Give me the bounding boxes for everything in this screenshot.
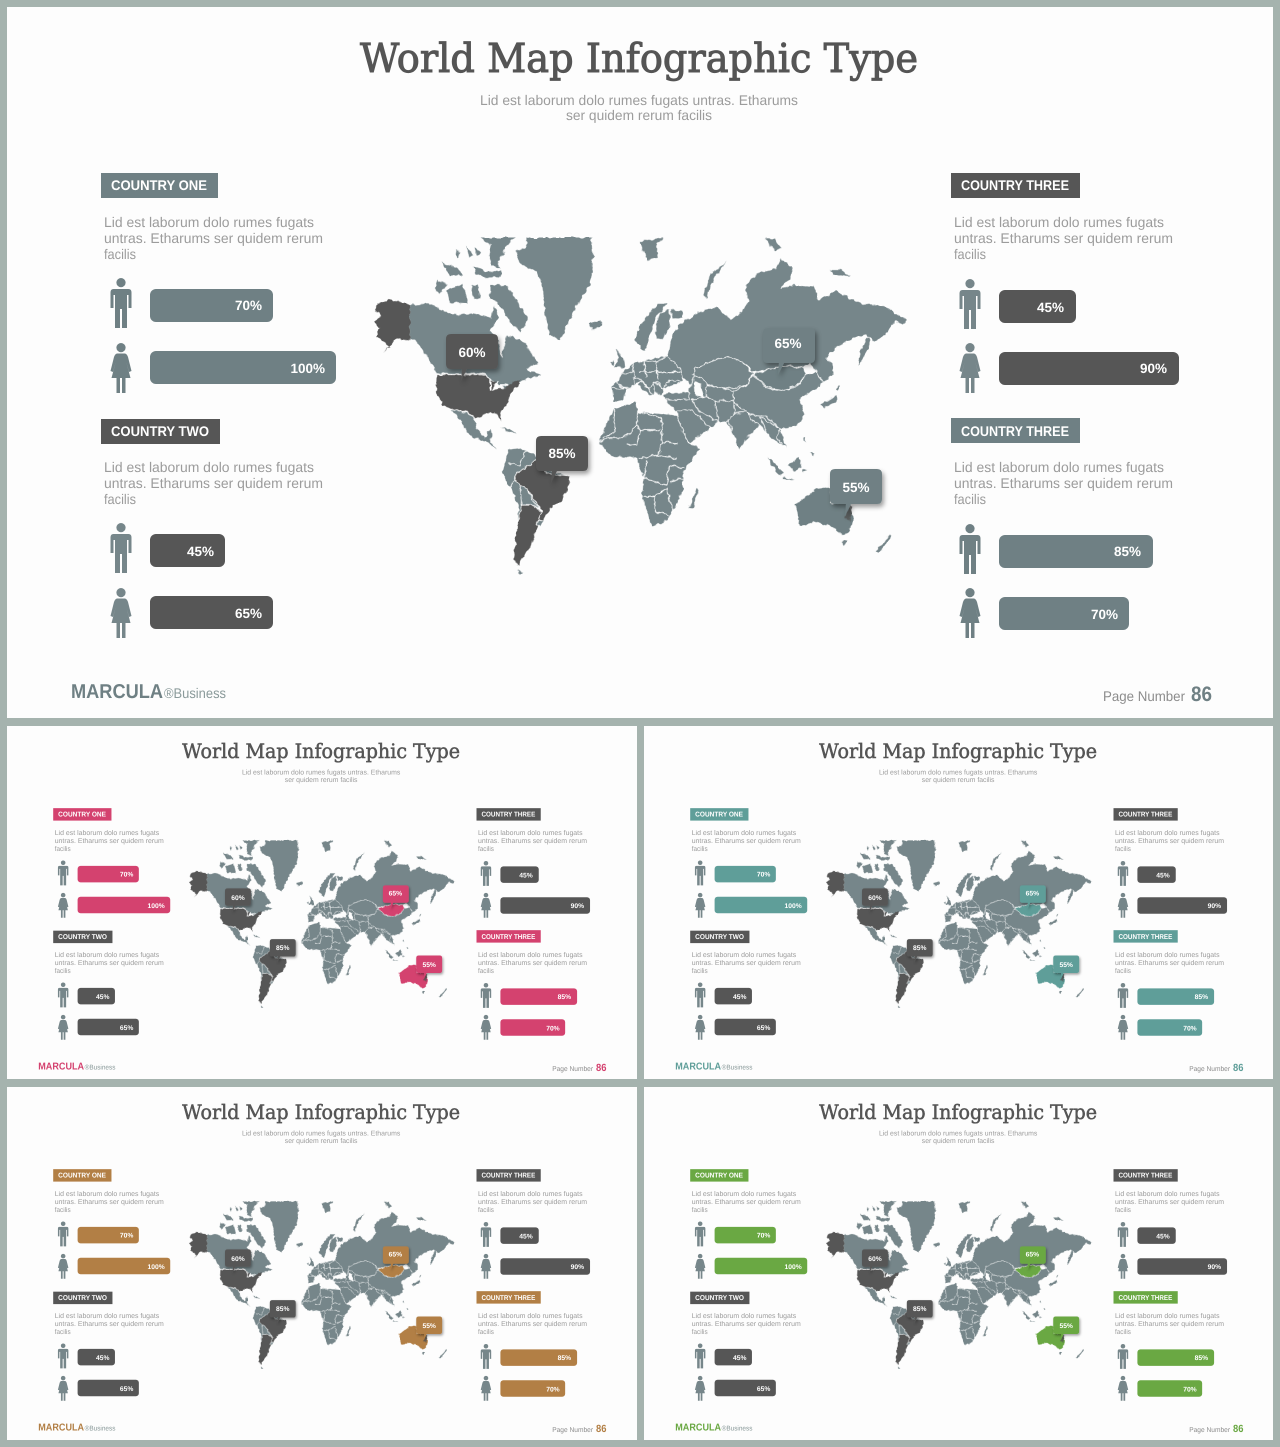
panel: country one: Lid est laborum dolo rumes fugats: [104, 214, 314, 230]
panel: country one: facilis: [104, 246, 136, 262]
green slide content: untras. Etharums ser quidem rerum: [692, 1198, 801, 1206]
teal slide content: untras. Etharums ser quidem rerum: [1115, 837, 1224, 845]
pink slide content: facilis: [55, 845, 71, 852]
pink slide content: 90%: [571, 902, 584, 909]
panel: country three top: 45%: [1037, 300, 1064, 315]
green slide content: Lid est laborum dolo rumes fugats untras. Etharums: [879, 1129, 1037, 1137]
teal slide content: COUNTRY THREE: [1118, 933, 1172, 941]
panel: country two: 45%: [187, 544, 214, 559]
teal slide content: Page Number: [1189, 1065, 1230, 1073]
green slide content: 100%: [785, 1263, 802, 1270]
brown slide content: COUNTRY TWO: [58, 1294, 107, 1302]
panel: country three top: untras. Etharums ser quidem rerum: [954, 230, 1173, 246]
teal slide content: 85%: [913, 944, 927, 952]
page number: Page Number: [1103, 688, 1185, 704]
panel: country three bottom: COUNTRY THREE: [961, 423, 1069, 439]
subtitle: Lid est laborum dolo rumes fugats untras. Etharums: [480, 92, 798, 108]
pink slide content: 45%: [96, 993, 109, 1000]
teal slide content: 45%: [1156, 871, 1170, 879]
teal slide content: 86: [1233, 1062, 1243, 1074]
footer brand: ®Business: [164, 685, 226, 701]
pink slide content: World Map Infographic Type: [182, 740, 460, 763]
panel: country three bottom: untras. Etharums ser quidem rerum: [954, 475, 1173, 491]
callout 65%: [763, 328, 815, 375]
panel: country two: [101, 419, 323, 638]
green slide content: facilis: [692, 1206, 708, 1213]
teal slide content: untras. Etharums ser quidem rerum: [1115, 959, 1224, 967]
teal slide content: facilis: [692, 967, 708, 974]
brown slide content: COUNTRY ONE: [58, 1171, 106, 1179]
brown slide content: Lid est laborum dolo rumes fugats: [478, 1190, 583, 1198]
teal slide content: 65%: [1026, 889, 1039, 897]
teal slide content: facilis: [1115, 967, 1131, 974]
brown slide content: COUNTRY THREE: [481, 1171, 535, 1179]
teal slide content: COUNTRY TWO: [695, 933, 744, 941]
brown slide content: untras. Etharums ser quidem rerum: [478, 1320, 587, 1328]
brown slide content: COUNTRY THREE: [481, 1294, 535, 1302]
pink slide content: [38, 740, 606, 1074]
green slide content: 70%: [757, 1231, 770, 1239]
teal slide content: 70%: [1183, 1024, 1197, 1032]
green slide content: facilis: [1115, 1328, 1131, 1335]
brown slide content: Lid est laborum dolo rumes fugats: [478, 1312, 583, 1320]
pink slide content: Page Number: [552, 1065, 593, 1073]
panel: green slide: [644, 1087, 1273, 1440]
pink slide content: Lid est laborum dolo rumes fugats untras. Etharums: [242, 768, 400, 776]
green slide content: 86: [1233, 1423, 1243, 1435]
brown slide content: facilis: [55, 1206, 71, 1213]
panel: country two: 65%: [235, 606, 262, 621]
pink slide content: Lid est laborum dolo rumes fugats: [55, 829, 159, 837]
pink slide content: facilis: [55, 967, 71, 974]
panel: country three top: [951, 173, 1179, 393]
green slide content: COUNTRY THREE: [1118, 1294, 1172, 1302]
pink slide content: 86: [596, 1062, 606, 1074]
callout 55%: 55%: [842, 480, 870, 495]
pink slide content: ser quidem rerum facilis: [285, 775, 357, 783]
brown slide content: untras. Etharums ser quidem rerum: [55, 1320, 164, 1328]
brown slide content: Lid est laborum dolo rumes fugats: [55, 1190, 159, 1198]
green slide content: 65%: [1026, 1250, 1039, 1258]
brown slide content: facilis: [55, 1328, 71, 1335]
footer brand: MARCULA: [71, 681, 163, 703]
panel: country three bottom: 70%: [1091, 607, 1118, 622]
panel: teal slide: [644, 726, 1273, 1079]
pink slide content: untras. Etharums ser quidem rerum: [55, 837, 164, 845]
green slide content: 85%: [913, 1305, 927, 1313]
title: World Map Infographic Type: [360, 36, 918, 82]
teal slide content: Lid est laborum dolo rumes fugats: [1115, 829, 1220, 837]
brown slide content: 90%: [571, 1263, 584, 1270]
teal slide content: 90%: [1208, 902, 1221, 909]
pink slide content: facilis: [478, 845, 494, 852]
green slide content: ®Business: [722, 1424, 752, 1432]
brown slide content: 65%: [120, 1385, 133, 1392]
panel: country three bottom: facilis: [954, 491, 986, 507]
panel: country one: COUNTRY ONE: [111, 177, 207, 193]
panel: country one: [101, 173, 336, 393]
brown slide content: 85%: [276, 1305, 290, 1313]
brown slide content: Lid est laborum dolo rumes fugats: [55, 1312, 159, 1320]
pink slide content: COUNTRY ONE: [58, 810, 106, 818]
green slide content: untras. Etharums ser quidem rerum: [1115, 1320, 1224, 1328]
panel: country one: untras. Etharums ser quidem rerum: [104, 230, 323, 246]
brown slide content: 45%: [519, 1232, 533, 1240]
callout 65%: 65%: [774, 336, 802, 351]
brown slide content: Lid est laborum dolo rumes fugats untras. Etharums: [242, 1129, 400, 1137]
teal slide content: [675, 740, 1243, 1074]
callout 85%: [536, 436, 588, 483]
green slide content: ser quidem rerum facilis: [922, 1136, 994, 1144]
world map: [373, 238, 908, 574]
callout 60%: 60%: [458, 345, 486, 360]
pink slide content: Lid est laborum dolo rumes fugats: [478, 951, 583, 959]
footer brand: [71, 681, 226, 703]
brown slide content: 70%: [546, 1385, 560, 1393]
pink slide content: 85%: [276, 944, 290, 952]
teal slide content: 100%: [785, 902, 802, 909]
green slide content: 45%: [733, 1354, 746, 1361]
teal slide content: 60%: [868, 894, 882, 901]
pink slide content: COUNTRY THREE: [481, 933, 535, 941]
pink slide content: 45%: [519, 871, 533, 879]
brown slide content: ®Business: [85, 1424, 115, 1432]
green slide content: Lid est laborum dolo rumes fugats: [692, 1190, 796, 1198]
teal slide content: COUNTRY THREE: [1118, 810, 1172, 818]
brown slide content: 70%: [120, 1231, 133, 1239]
brown slide content: 60%: [231, 1255, 245, 1262]
panel: country three bottom: Lid est laborum dolo rumes fugats: [954, 459, 1164, 475]
green slide content: World Map Infographic Type: [819, 1101, 1097, 1124]
teal slide content: Lid est laborum dolo rumes fugats: [692, 829, 796, 837]
pink slide content: COUNTRY TWO: [58, 933, 107, 941]
pink slide content: 85%: [558, 993, 571, 1000]
pink slide content: 55%: [422, 961, 436, 969]
green slide content: 85%: [1195, 1354, 1208, 1361]
panel: country three top: COUNTRY THREE: [961, 177, 1069, 193]
brown slide content: 45%: [96, 1354, 109, 1361]
teal slide content: 55%: [1059, 961, 1073, 969]
panel: pink slide: [7, 726, 637, 1079]
teal slide content: untras. Etharums ser quidem rerum: [692, 837, 801, 845]
green slide content: 45%: [1156, 1232, 1170, 1240]
green slide content: COUNTRY ONE: [695, 1171, 743, 1179]
panel: country three top: 90%: [1140, 361, 1167, 376]
panel: country two: COUNTRY TWO: [111, 423, 209, 439]
page number: 86: [1191, 683, 1212, 706]
pink slide content: 65%: [389, 889, 402, 897]
teal slide content: World Map Infographic Type: [819, 740, 1097, 763]
green slide content: 55%: [1059, 1322, 1073, 1330]
panel: country three top: Lid est laborum dolo rumes fugats: [954, 214, 1164, 230]
teal slide content: Lid est laborum dolo rumes fugats untras. Etharums: [879, 768, 1037, 776]
teal slide content: MARCULA: [675, 1061, 721, 1072]
brown slide content: untras. Etharums ser quidem rerum: [55, 1198, 164, 1206]
panel: brown slide: [7, 1087, 637, 1440]
green slide content: untras. Etharums ser quidem rerum: [1115, 1198, 1224, 1206]
teal slide content: ®Business: [722, 1063, 752, 1071]
panel: country one: 70%: [235, 298, 262, 313]
green slide content: facilis: [692, 1328, 708, 1335]
brown slide content: World Map Infographic Type: [182, 1101, 460, 1124]
brown slide content: untras. Etharums ser quidem rerum: [478, 1198, 587, 1206]
pink slide content: 70%: [546, 1024, 560, 1032]
pink slide content: untras. Etharums ser quidem rerum: [55, 959, 164, 967]
green slide content: Lid est laborum dolo rumes fugats: [1115, 1312, 1220, 1320]
teal slide content: Lid est laborum dolo rumes fugats: [692, 951, 796, 959]
pink slide content: 100%: [148, 902, 165, 909]
teal slide content: 85%: [1195, 993, 1208, 1000]
green slide content: untras. Etharums ser quidem rerum: [692, 1320, 801, 1328]
green slide content: facilis: [1115, 1206, 1131, 1213]
teal slide content: 65%: [757, 1024, 770, 1031]
panel: country two: untras. Etharums ser quidem rerum: [104, 475, 323, 491]
pink slide content: 70%: [120, 870, 133, 878]
brown slide content: facilis: [478, 1328, 494, 1335]
teal slide content: COUNTRY ONE: [695, 810, 743, 818]
brown slide content: 100%: [148, 1263, 165, 1270]
brown slide content: 85%: [558, 1354, 571, 1361]
panel: country three top: facilis: [954, 246, 986, 262]
page number: [1103, 683, 1212, 706]
panel: main slide: [7, 7, 1273, 718]
pink slide content: facilis: [478, 967, 494, 974]
teal slide content: untras. Etharums ser quidem rerum: [692, 959, 801, 967]
pink slide content: 60%: [231, 894, 245, 901]
green slide content: MARCULA: [675, 1422, 721, 1433]
pink slide content: 65%: [120, 1024, 133, 1031]
green slide content: Page Number: [1189, 1426, 1230, 1434]
brown slide content: [38, 1101, 606, 1435]
subtitle: [480, 92, 798, 123]
callout 55%: [830, 469, 882, 516]
green slide content: COUNTRY THREE: [1118, 1171, 1172, 1179]
pink slide content: Lid est laborum dolo rumes fugats: [55, 951, 159, 959]
pink slide content: Lid est laborum dolo rumes fugats: [478, 829, 583, 837]
pink slide content: untras. Etharums ser quidem rerum: [478, 959, 587, 967]
green slide content: Lid est laborum dolo rumes fugats: [692, 1312, 796, 1320]
green slide content: COUNTRY TWO: [695, 1294, 744, 1302]
subtitle: ser quidem rerum facilis: [566, 107, 712, 123]
green slide content: 90%: [1208, 1263, 1221, 1270]
teal slide content: facilis: [692, 845, 708, 852]
callout 60%: [446, 334, 498, 381]
panel: country three bottom: 85%: [1114, 544, 1141, 559]
teal slide content: 45%: [733, 993, 746, 1000]
green slide content: Lid est laborum dolo rumes fugats: [1115, 1190, 1220, 1198]
panel: country three bottom: [951, 418, 1173, 638]
brown slide content: MARCULA: [38, 1422, 84, 1433]
teal slide content: 70%: [757, 870, 770, 878]
brown slide content: Page Number: [552, 1426, 593, 1434]
teal slide content: ser quidem rerum facilis: [922, 775, 994, 783]
pink slide content: untras. Etharums ser quidem rerum: [478, 837, 587, 845]
panel: country one: 100%: [290, 361, 325, 376]
brown slide content: 55%: [422, 1322, 436, 1330]
green slide content: [675, 1101, 1243, 1435]
green slide content: 60%: [868, 1255, 882, 1262]
pink slide content: MARCULA: [38, 1061, 84, 1072]
pink slide content: ®Business: [85, 1063, 115, 1071]
brown slide content: ser quidem rerum facilis: [285, 1136, 357, 1144]
green slide content: 65%: [757, 1385, 770, 1392]
teal slide content: Lid est laborum dolo rumes fugats: [1115, 951, 1220, 959]
brown slide content: 65%: [389, 1250, 402, 1258]
teal slide content: facilis: [1115, 845, 1131, 852]
green slide content: 70%: [1183, 1385, 1197, 1393]
panel: country two: facilis: [104, 491, 136, 507]
brown slide content: 86: [596, 1423, 606, 1435]
panel: country two: Lid est laborum dolo rumes fugats: [104, 459, 314, 475]
pink slide content: COUNTRY THREE: [481, 810, 535, 818]
callout 85%: 85%: [548, 446, 576, 461]
brown slide content: facilis: [478, 1206, 494, 1213]
